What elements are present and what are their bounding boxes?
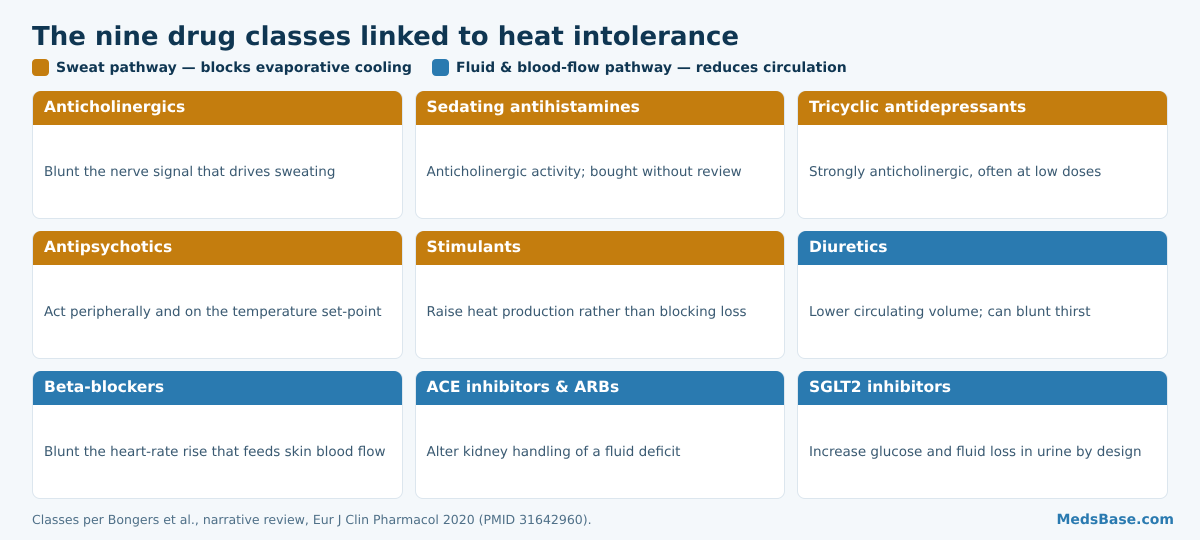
legend [32,59,847,76]
card header [33,371,402,405]
card header [416,231,784,265]
legend label: sweat pathway: Sweat pathway — blocks evaporative cooling [56,60,412,76]
card: Diuretics [797,231,1168,359]
brand: MedsBase.com [1056,512,1174,528]
card header: Stimulants [426,238,521,256]
card text: Anticholinergic activity; bought without review [426,164,742,180]
legend swatch: sweat pathway [32,59,49,76]
card: Stimulants [414,231,785,359]
card text: Act peripherally and on the temperature set-point [44,304,382,320]
card header: Diuretics [809,238,888,256]
card header: Sedating antihistamines [426,98,640,116]
card header [33,91,402,125]
source note: Classes per Bongers et al., narrative review, Eur J Clin Pharmacol 2020 (PMID 31642960). [32,512,592,527]
card text: Blunt the nerve signal that drives sweating [44,164,335,180]
card: ACE inhibitors & ARBs [414,371,785,499]
card: Tricyclic antidepressants [797,91,1168,219]
legend swatch: fluid pathway [432,59,449,76]
card text: Blunt the heart-rate rise that feeds skin blood flow [44,444,386,460]
card: Beta-blockers [32,371,403,499]
card header [798,91,1167,125]
legend label: fluid pathway: Fluid & blood-flow pathway — reduces circulation [456,60,847,76]
card header [33,231,402,265]
card: Anticholinergics [32,91,403,219]
card text: Lower circulating volume; can blunt thirst [809,304,1091,320]
card text: Alter kidney handling of a fluid deficit [426,444,680,460]
card text: Raise heat production rather than blocking loss [426,304,747,320]
card header: Antipsychotics [44,238,172,256]
card: Sedating antihistamines [414,91,785,219]
card header: SGLT2 inhibitors [809,378,951,396]
card header [798,371,1167,405]
card: Antipsychotics [32,231,403,359]
title: The nine drug classes linked to heat intolerance [32,22,739,52]
card: SGLT2 inhibitors [797,371,1168,499]
card header: Anticholinergics [44,98,185,116]
card header [798,231,1167,265]
card header: Tricyclic antidepressants [809,98,1026,116]
card header [416,371,784,405]
card header [416,91,784,125]
card header: Beta-blockers [44,378,164,396]
card header: ACE inhibitors & ARBs [426,378,619,396]
card text: Increase glucose and fluid loss in urine by design [809,444,1142,460]
card text: Strongly anticholinergic, often at low doses [809,164,1101,180]
